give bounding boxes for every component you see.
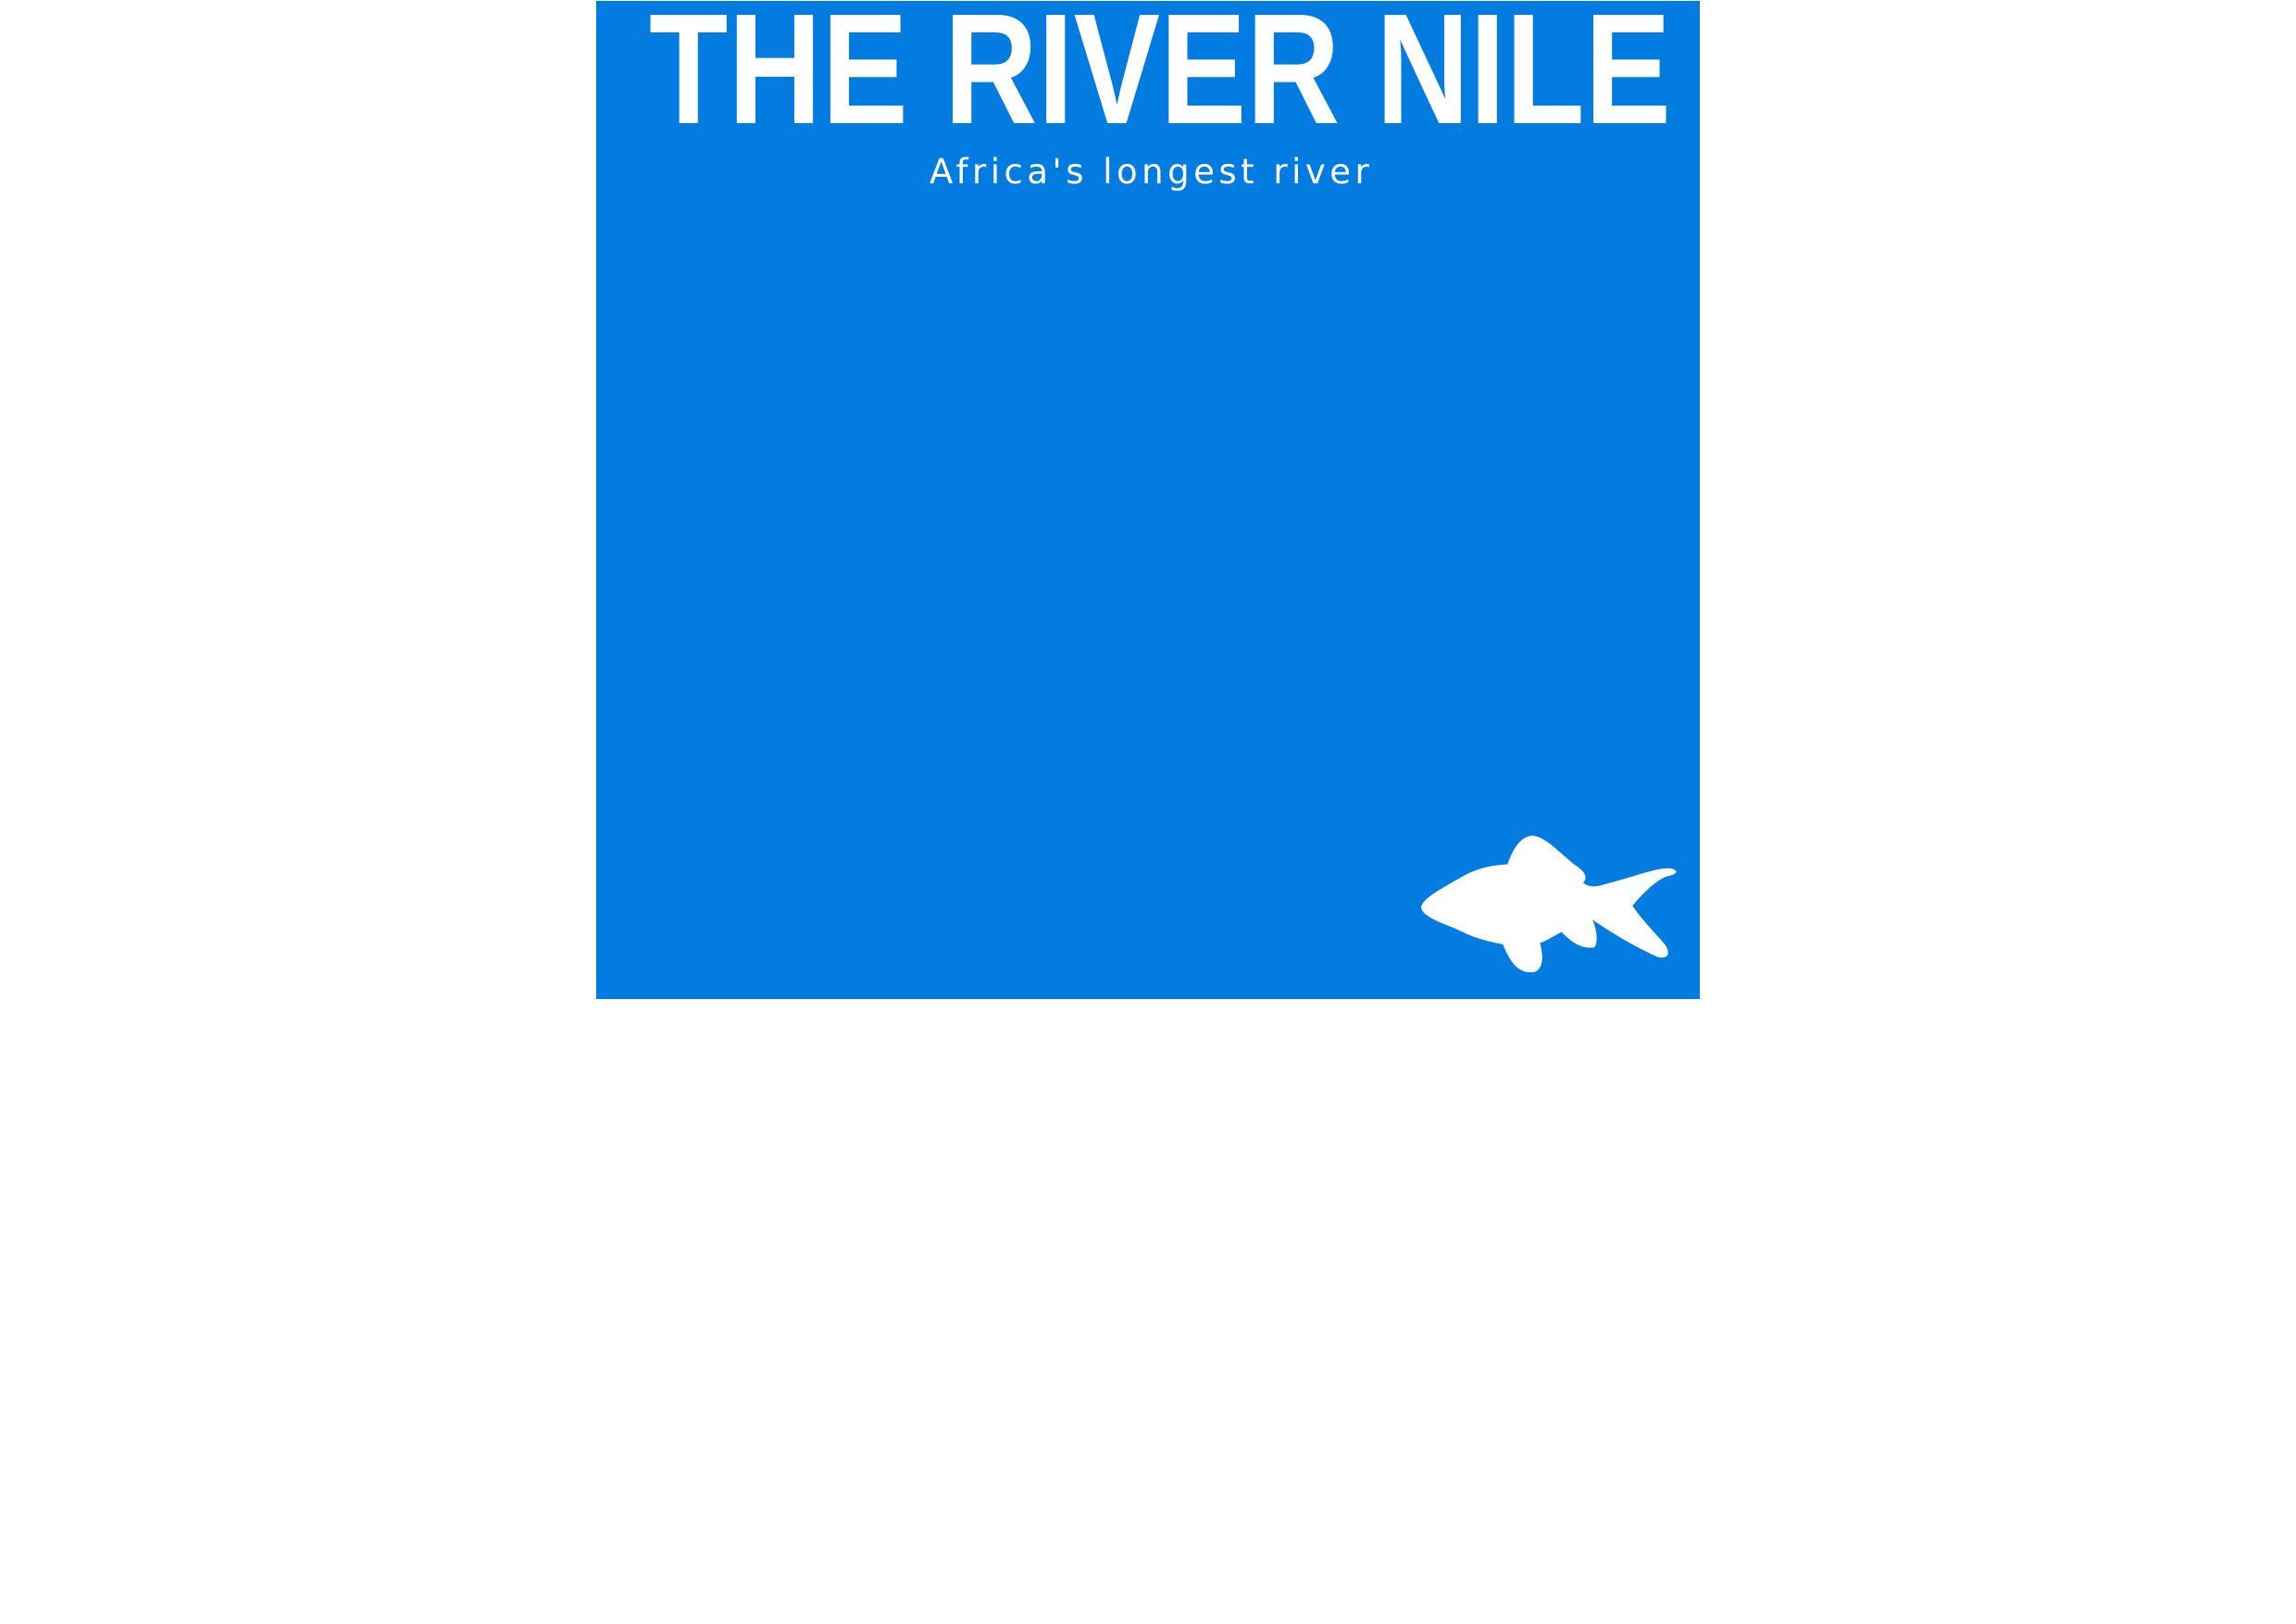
icon: fish <box>1421 835 1676 972</box>
subtitle: Africa's longest river <box>930 152 1373 192</box>
panel: blue background <box>596 1 1700 999</box>
